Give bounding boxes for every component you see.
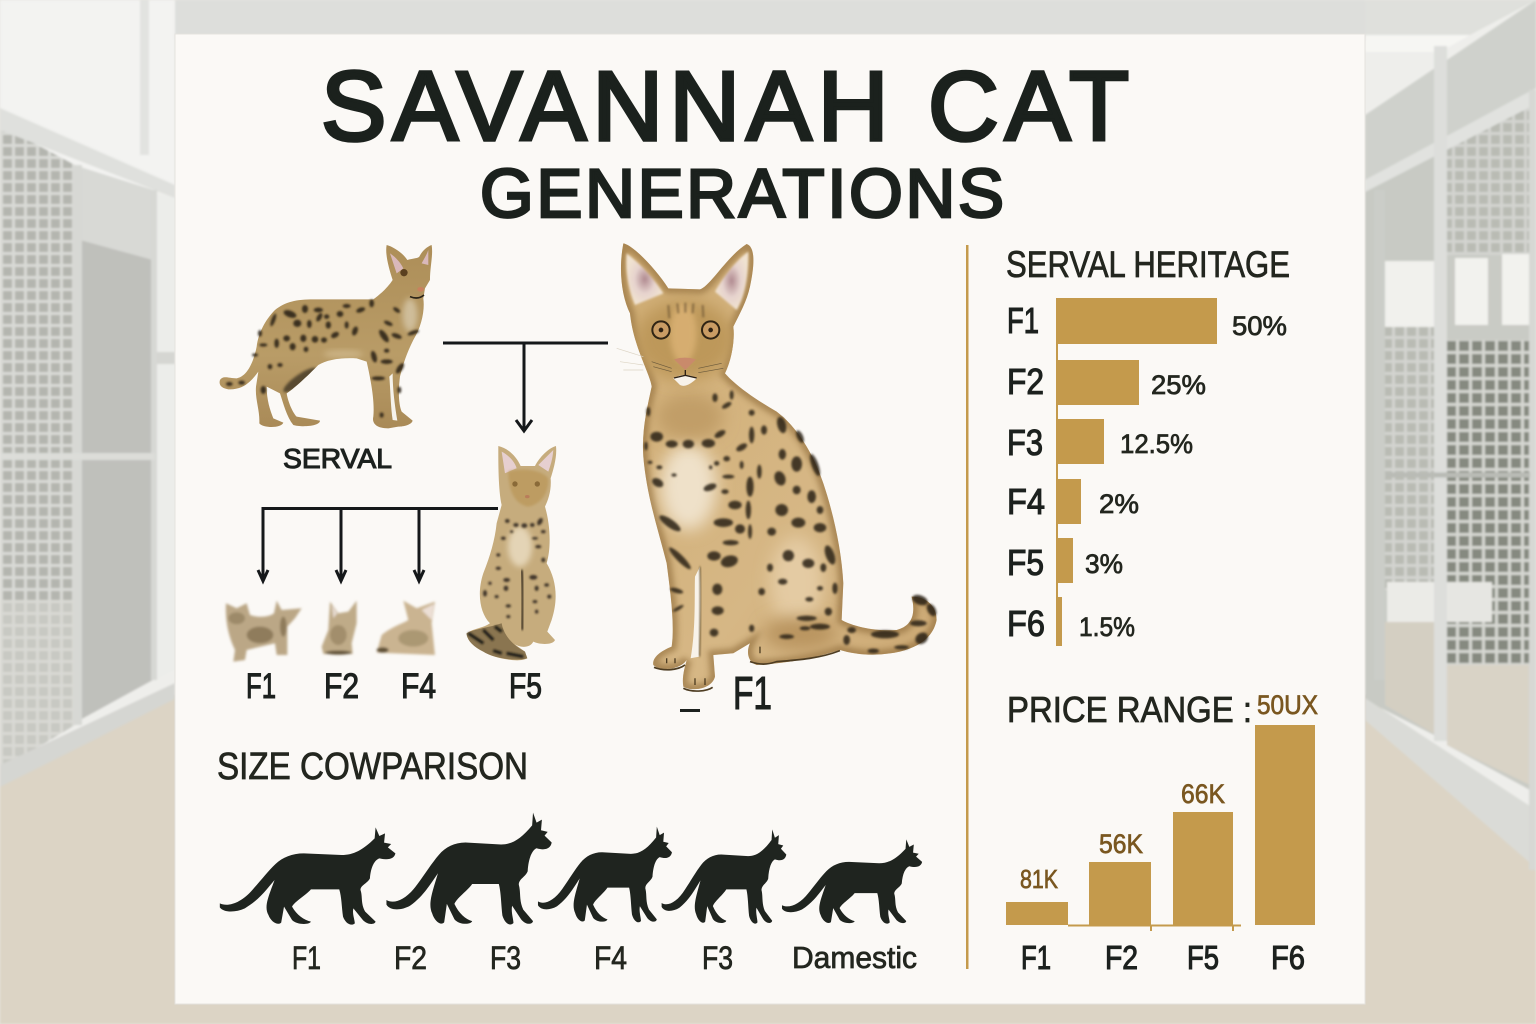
serval photo bbox=[220, 245, 432, 428]
size comparison labels: F3 bbox=[702, 940, 733, 976]
left cage panels bbox=[0, 125, 75, 770]
family tree: serval bbox=[220, 245, 432, 474]
heritage values bbox=[1079, 311, 1287, 642]
main poster panel bbox=[175, 34, 1365, 1004]
cross-breed connector arrow bbox=[443, 343, 608, 431]
left wall bbox=[0, 0, 175, 190]
generation branch arrows bbox=[258, 508, 498, 581]
sitting F5 cat bbox=[467, 446, 556, 660]
generation labels bbox=[246, 667, 542, 706]
right upper wall bbox=[1365, 0, 1536, 180]
size comparison labels: F1 bbox=[292, 940, 321, 976]
heritage row labels: F3 bbox=[1007, 422, 1043, 463]
cat ears bbox=[626, 252, 748, 310]
hero F1 cat photo bbox=[617, 243, 938, 691]
heritage row labels: F5 bbox=[1007, 542, 1044, 583]
silhouette F3 bbox=[538, 827, 672, 922]
title: GENERATIONS bbox=[480, 155, 1004, 232]
heritage row labels: F2 bbox=[1007, 361, 1044, 402]
cat face bbox=[617, 303, 723, 386]
heritage values: 1.5% bbox=[1079, 612, 1135, 642]
hero F1 label: F1 bbox=[733, 667, 772, 719]
cat paws bbox=[654, 651, 840, 691]
size comparison labels: F3 bbox=[490, 940, 521, 976]
floor bbox=[0, 695, 1536, 1024]
title: SAVANNAH CAT bbox=[321, 51, 1129, 161]
price values: 50UX bbox=[1257, 690, 1318, 720]
cat spots bbox=[644, 390, 938, 653]
title bbox=[321, 51, 1129, 232]
price axis labels: F5 bbox=[1187, 939, 1219, 976]
size comparison labels: Damestic bbox=[792, 940, 917, 975]
generation labels: F1 bbox=[246, 667, 276, 706]
price axis labels: F1 bbox=[1021, 939, 1051, 976]
size comparison heading: SIZE COWPARISON bbox=[217, 746, 528, 788]
heritage row labels: F6 bbox=[1007, 603, 1045, 644]
price axis labels bbox=[1021, 939, 1305, 976]
price bars bbox=[1006, 725, 1315, 931]
size comparison silhouettes bbox=[220, 813, 922, 925]
F1 kitten bbox=[226, 601, 302, 662]
size comparison labels bbox=[292, 940, 917, 976]
price values: 66K bbox=[1181, 779, 1225, 809]
generation labels: F5 bbox=[509, 667, 542, 706]
heritage bars bbox=[1056, 298, 1217, 646]
price values bbox=[1020, 690, 1318, 894]
cat shading bbox=[621, 243, 937, 689]
F2 kitten bbox=[322, 601, 357, 655]
heritage values: 12.5% bbox=[1120, 429, 1193, 459]
generation labels: F2 bbox=[324, 667, 359, 706]
heritage values: 2% bbox=[1099, 489, 1139, 519]
silhouette F2 bbox=[386, 813, 552, 925]
heritage values: 3% bbox=[1085, 549, 1123, 579]
panel: price range bbox=[1006, 689, 1318, 976]
price values: 56K bbox=[1099, 829, 1143, 859]
heritage row labels: F4 bbox=[1007, 481, 1045, 522]
heritage heading: SERVAL HERITAGE bbox=[1006, 244, 1290, 285]
panel: serval heritage bbox=[1006, 244, 1290, 646]
heritage values: 50% bbox=[1232, 311, 1287, 341]
hero F1 label bbox=[680, 667, 772, 719]
price axis labels: F6 bbox=[1271, 939, 1305, 976]
price axis labels: F2 bbox=[1105, 939, 1138, 976]
cat foreleg gap bbox=[691, 567, 701, 658]
right cage panels bbox=[1365, 145, 1440, 738]
generation labels: F4 bbox=[401, 667, 436, 706]
heritage row labels: F1 bbox=[1007, 300, 1039, 341]
size comparison labels: F4 bbox=[594, 940, 627, 976]
silhouette domestic bbox=[782, 839, 922, 924]
serval label: SERVAL bbox=[283, 443, 392, 474]
price values: 81K bbox=[1020, 864, 1059, 894]
price heading: PRICE RANGE : bbox=[1007, 689, 1252, 730]
silhouette F1 bbox=[220, 827, 395, 925]
heritage row labels bbox=[1007, 300, 1045, 644]
F4 kitten bbox=[377, 601, 435, 655]
silhouette F4 bbox=[662, 829, 786, 924]
size comparison labels: F2 bbox=[394, 940, 427, 976]
heritage values: 25% bbox=[1151, 370, 1206, 400]
